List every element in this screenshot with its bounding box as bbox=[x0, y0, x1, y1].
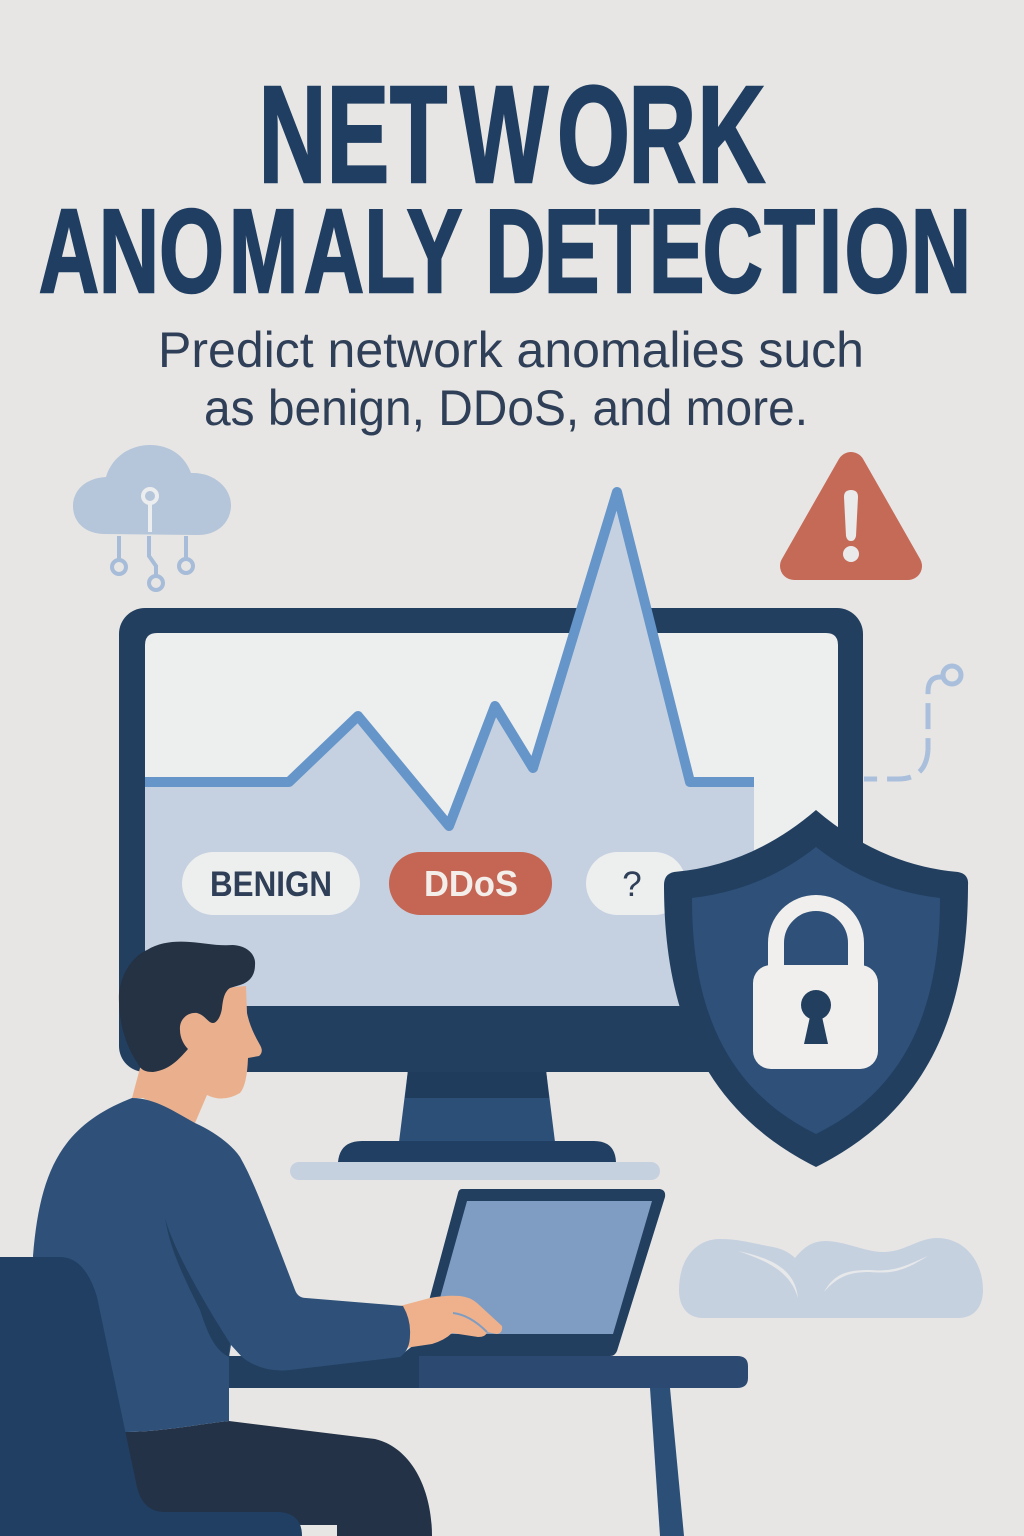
arm crease bbox=[165, 1218, 230, 1357]
legs bbox=[100, 1421, 432, 1536]
subtitle: Predict network anomalies such bbox=[158, 322, 864, 378]
label: ddos: DDoS bbox=[424, 863, 518, 904]
icon: dashed circuit line bbox=[864, 666, 961, 779]
monitor bbox=[119, 492, 863, 1180]
chair bbox=[0, 1257, 302, 1536]
hair bbox=[119, 942, 255, 1072]
title bbox=[39, 58, 971, 317]
laptop bbox=[400, 1189, 665, 1356]
label: unknown: ? bbox=[622, 865, 642, 904]
subtitle: as benign, DDoS, and more. bbox=[204, 380, 808, 436]
chart area fill bbox=[145, 492, 754, 1006]
desk bbox=[229, 1356, 748, 1536]
monitor screen bbox=[145, 633, 838, 1006]
icon: cloud with circuit bbox=[73, 445, 231, 590]
icon: security shield with padlock bbox=[664, 810, 968, 1167]
icon: pale cloud bbox=[679, 1238, 983, 1318]
label: ddos bbox=[389, 852, 552, 915]
person bbox=[33, 942, 502, 1536]
label: benign bbox=[182, 852, 360, 915]
line chart spike bbox=[145, 492, 754, 826]
label: benign: BENIGN bbox=[210, 865, 332, 904]
hand bbox=[400, 1296, 502, 1348]
title: NETWORK bbox=[259, 58, 765, 212]
subtitle bbox=[158, 322, 864, 436]
neck and face bbox=[132, 986, 262, 1123]
label: unknown bbox=[586, 852, 686, 915]
monitor stand bbox=[290, 1070, 660, 1180]
torso and arm bbox=[33, 1098, 410, 1432]
finger line bbox=[453, 1313, 487, 1332]
monitor frame bbox=[119, 608, 863, 1072]
icon: warning triangle bbox=[794, 466, 908, 566]
title: ANOMALY DETECTION bbox=[39, 184, 971, 317]
